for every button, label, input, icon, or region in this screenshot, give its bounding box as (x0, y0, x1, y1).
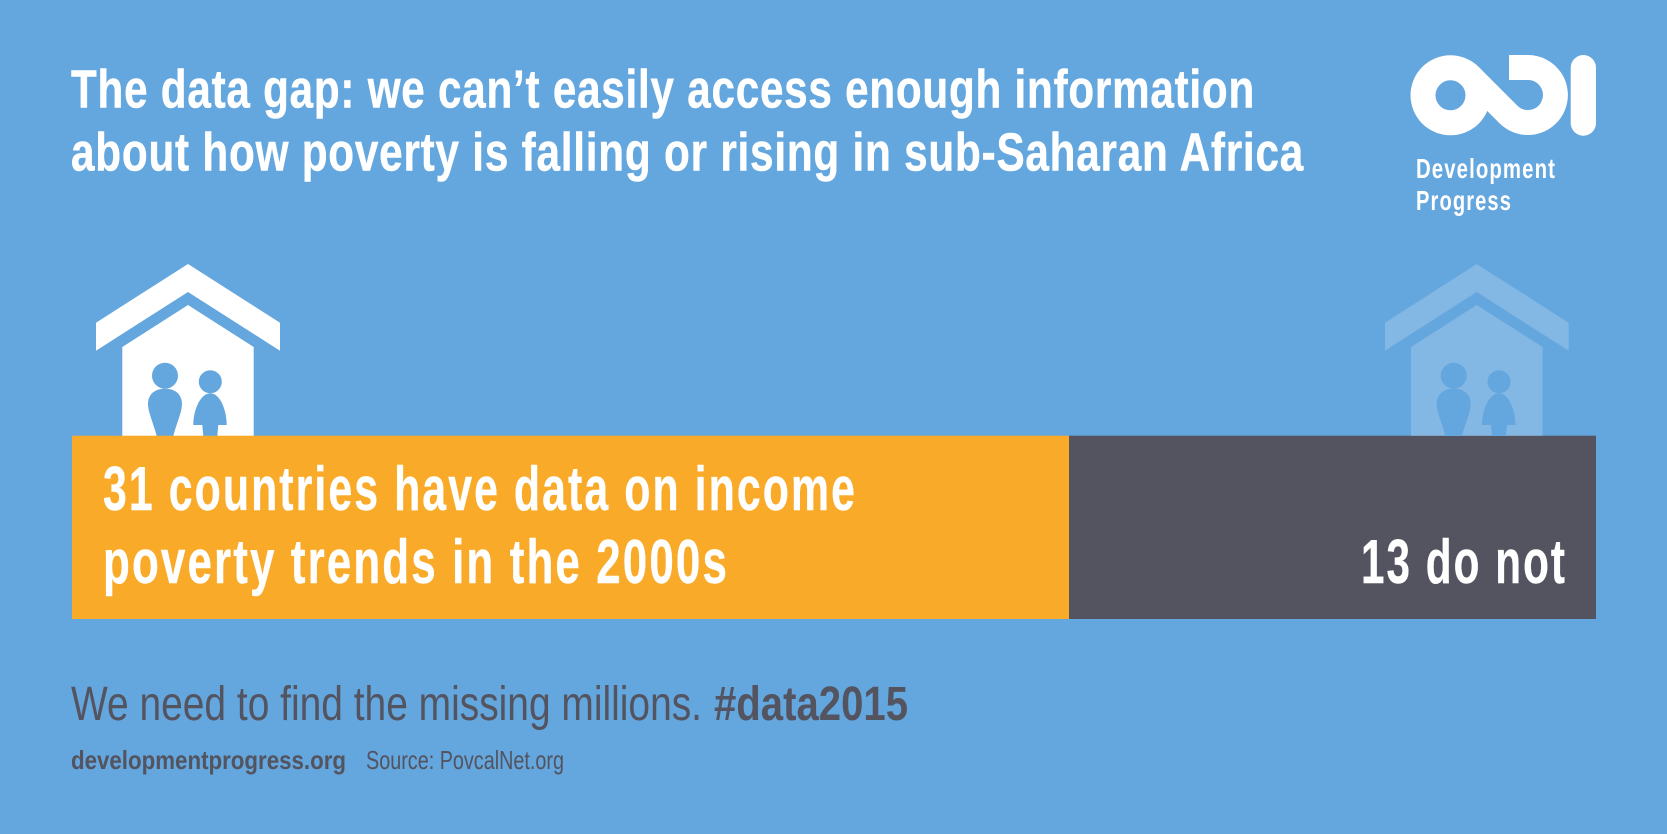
title: The data gap: we can’t easily access enough information (71, 59, 1255, 119)
icon: faded house with people (no data) (1385, 264, 1569, 436)
call to action: #data2015 (714, 678, 908, 731)
title (71, 59, 1304, 183)
bar label: 31 countries (103, 455, 857, 597)
logo text: Development (1416, 153, 1556, 184)
bar: 13 countries without data (1069, 436, 1596, 619)
website link: developmentprogress.org (71, 745, 346, 775)
bar label: 31 countries: 31 countries have data on income (103, 455, 857, 524)
bar label: 13 do not: 13 do not (1361, 528, 1567, 597)
title: about how poverty is falling or rising in sub-Saharan Africa (71, 123, 1304, 183)
source: Source: PovcalNet.org (366, 745, 564, 775)
icon: house with people (have data) (96, 264, 280, 436)
bar: 31 countries with data (72, 436, 1069, 619)
logo text (1416, 153, 1556, 216)
logo: ODI Development Progress (1416, 55, 1596, 216)
bar label: 31 countries: poverty trends in the 2000s (103, 528, 729, 597)
icon: ODI mark (1423, 55, 1596, 136)
call to action: We need to find the missing millions. (71, 678, 702, 731)
logo text: Progress (1416, 185, 1512, 216)
